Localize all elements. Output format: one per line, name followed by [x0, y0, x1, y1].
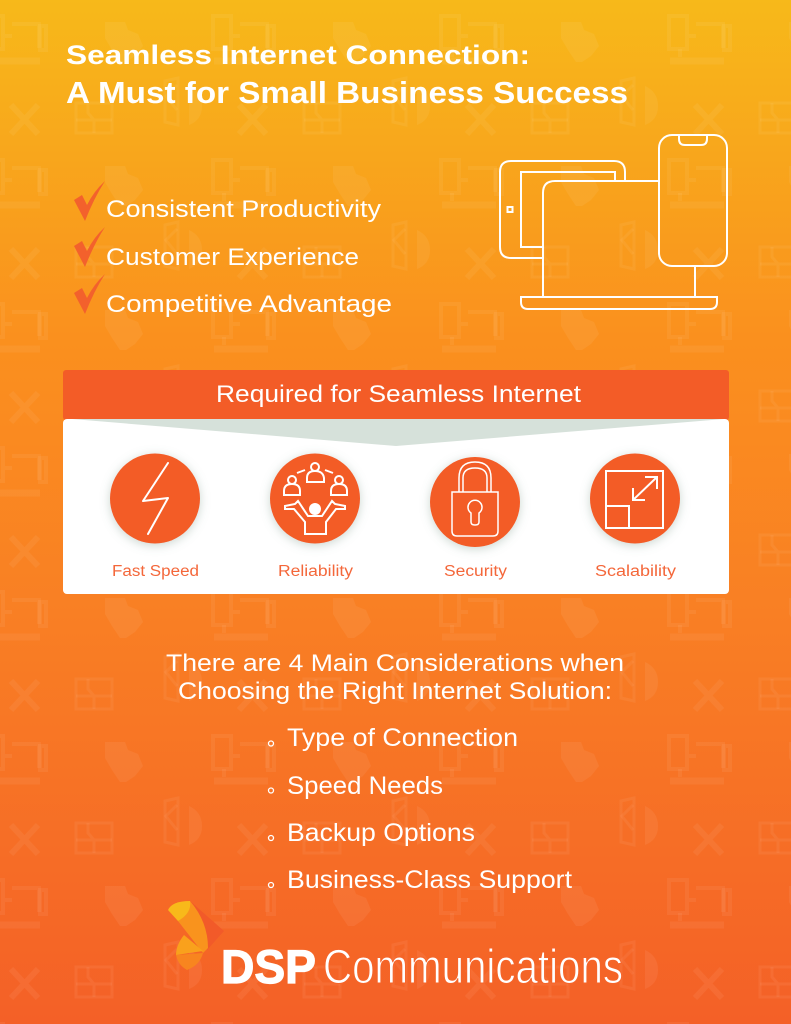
considerations heading: There are 4 Main Considerations when [166, 650, 624, 677]
panel heading banner: Required for Seamless Internet [216, 381, 581, 408]
item: reliability [270, 454, 360, 580]
bullet [268, 741, 274, 746]
title: A Must for Small Business Success [66, 75, 628, 110]
icon: check 3 [74, 274, 105, 314]
benefit: consistent productivity: Consistent Productivity [106, 196, 382, 223]
bullet [268, 788, 274, 793]
icon: tablet, laptop and phone [500, 135, 727, 309]
title: Seamless Internet Connection: [66, 40, 530, 70]
panel heading banner [63, 370, 729, 420]
benefit: customer experience: Customer Experience [106, 244, 359, 271]
panel: required for seamless internet [63, 370, 729, 594]
item: scalability: Scalability [595, 563, 676, 580]
item: scalability [590, 454, 680, 580]
benefits checklist [74, 181, 392, 318]
logo: DSP Communications [168, 901, 623, 994]
bullet [268, 836, 274, 840]
logo: DSP Communications: Communications [323, 941, 623, 994]
considerations list [268, 724, 572, 894]
logo wordmark: DSP [221, 940, 316, 993]
item: fast speed: Fast Speed [112, 563, 199, 580]
icon: check 1 [74, 181, 105, 221]
grey wedge [72, 419, 724, 446]
list item: type of connection: Type of Connection [287, 724, 518, 752]
list item: backup options: Backup Options [287, 819, 475, 847]
logo mark [168, 901, 224, 970]
item: fast speed [110, 454, 200, 580]
benefit: competitive advantage: Competitive Advantage [106, 291, 392, 318]
item: security [430, 457, 520, 580]
title [66, 40, 628, 110]
item: reliability: Reliability [278, 563, 353, 580]
item: security: Security [444, 563, 507, 580]
considerations heading: Choosing the Right Internet Solution: [178, 678, 612, 705]
icon: check 2 [74, 227, 105, 267]
white panel body [63, 419, 729, 594]
considerations heading [166, 650, 624, 705]
list item: business-class support: Business-Class Support [287, 866, 572, 894]
bullet [268, 882, 274, 888]
list item: speed needs: Speed Needs [287, 772, 443, 800]
